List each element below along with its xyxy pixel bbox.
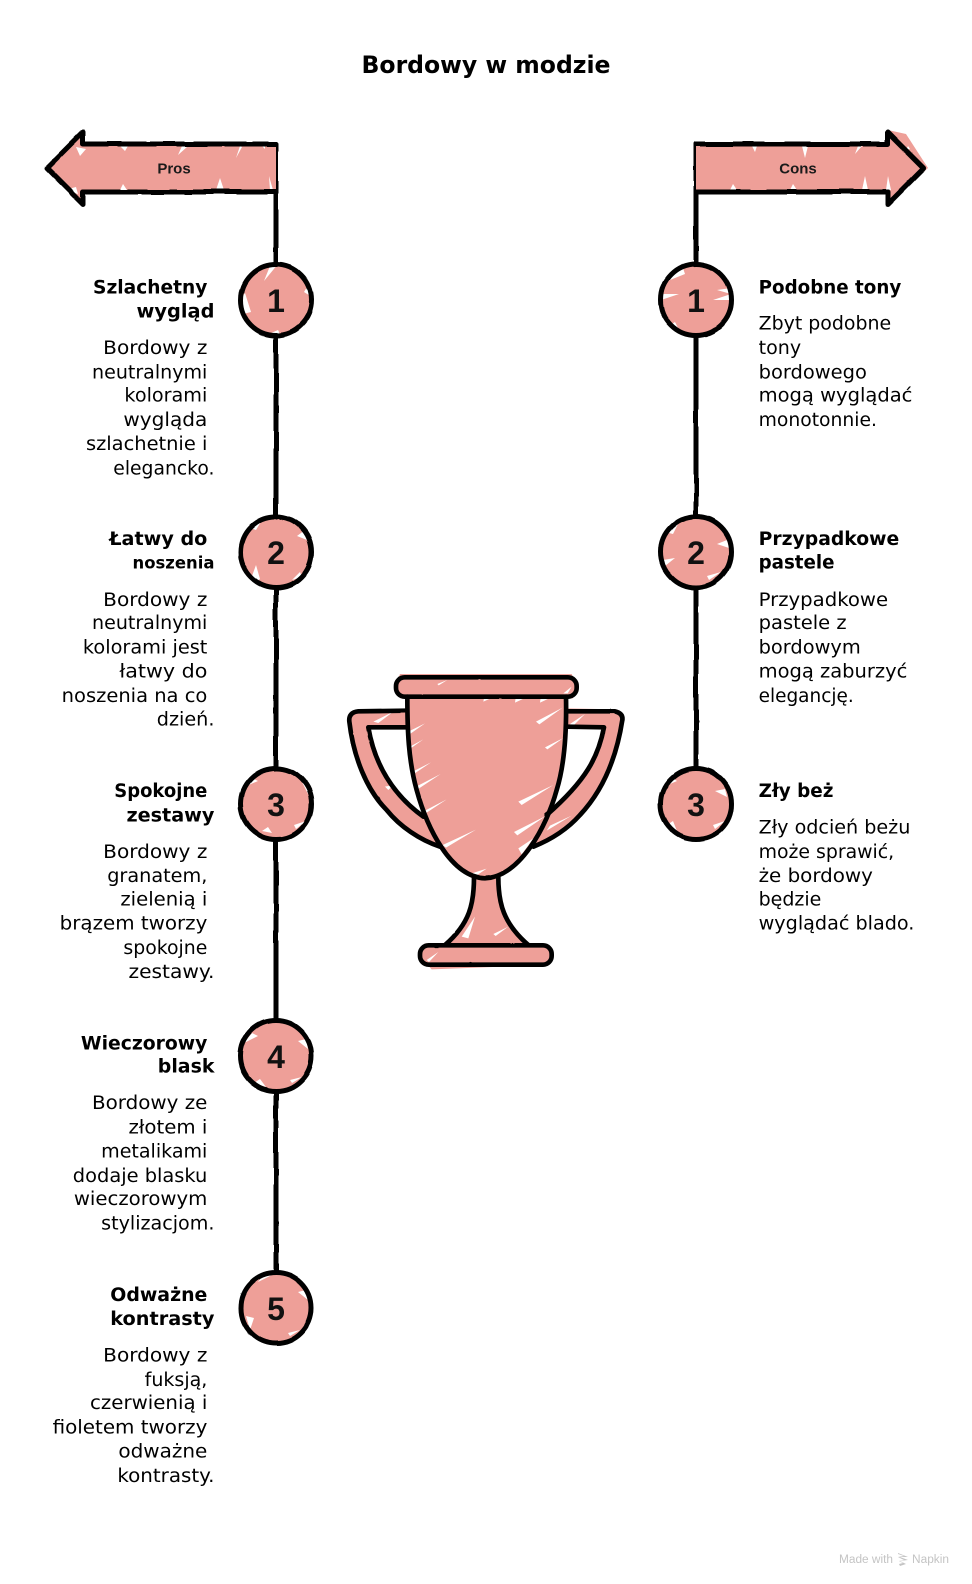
- text: Szlachetny wygląd: kolorami: [124, 386, 207, 407]
- text: Zły beż: [759, 781, 914, 935]
- text: Spokojne zestawy: Spokojne: [114, 781, 207, 802]
- text: Szlachetny wygląd: elegancko.: [113, 458, 214, 479]
- text: Spokojne zestawy: zestawy: [126, 805, 215, 826]
- marker 1: 1: [687, 283, 705, 319]
- text: Wieczorowy blask: złotem i: [128, 1117, 207, 1138]
- arrow: pros: [46, 132, 276, 204]
- text: Spokojne zestawy: [60, 781, 215, 983]
- text: Podobne tony: monotonnie.: [759, 410, 877, 431]
- marker 2: 2: [687, 535, 705, 571]
- text: Odważne kontrasty: kontrasty.: [117, 1466, 214, 1487]
- text: Podobne tony: mogą wyglądać: [759, 386, 912, 407]
- text: Szlachetny wygląd: neutralnymi: [92, 362, 207, 383]
- text: Spokojne zestawy: zielenią i: [120, 889, 207, 910]
- trophy outline: [349, 677, 622, 965]
- text: Szlachetny wygląd: [86, 277, 214, 479]
- text: Przypadkowe pastele: mogą zaburzyć: [759, 662, 907, 683]
- text: Spokojne zestawy: spokojne: [123, 938, 207, 959]
- text: Podobne tony: Podobne tony: [759, 277, 901, 298]
- marker 3: 3: [687, 787, 705, 823]
- text: Łatwy do noszenia: noszenia na co: [62, 686, 207, 707]
- text: Odważne kontrasty: czerwienią i: [90, 1393, 207, 1414]
- text: Wieczorowy blask: Bordowy ze: [92, 1093, 207, 1114]
- marker 1: [660, 264, 732, 336]
- footer: Made with Napkin: [839, 1553, 949, 1566]
- text: Podobne tony: Zbyt podobne: [759, 314, 891, 335]
- text: Wieczorowy blask: blask: [158, 1057, 215, 1078]
- title: Bordowy w modzie: [362, 51, 610, 79]
- pros item 5: [53, 1272, 312, 1487]
- text: Przypadkowe pastele: [759, 529, 907, 707]
- marker 2: 2: [267, 535, 285, 571]
- text: Łatwy do noszenia: łatwy do: [119, 662, 207, 683]
- text: Odważne kontrasty: Odważne: [110, 1285, 207, 1306]
- trophy: [348, 674, 624, 969]
- text: Szlachetny wygląd: wygląda: [123, 410, 207, 431]
- text: Łatwy do noszenia: neutralnymi: [92, 613, 207, 634]
- marker 3: [240, 768, 312, 840]
- marker 1: 1: [267, 283, 285, 319]
- text: Wieczorowy blask: [73, 1033, 215, 1234]
- text: Podobne tony: [759, 277, 912, 431]
- arrow: cons: [696, 130, 928, 204]
- marker 5: 5: [267, 1291, 285, 1327]
- text: Odważne kontrasty: kontrasty: [110, 1309, 215, 1330]
- text: Przypadkowe pastele: Przypadkowe: [759, 590, 888, 611]
- text: Łatwy do noszenia: [62, 529, 214, 730]
- vertical timeline: pros: [274, 144, 278, 1285]
- footer: Made with Napkin: Napkin: [912, 1554, 949, 1566]
- vertical timeline: cons: [694, 144, 698, 780]
- text: Zły beż: będzie: [759, 889, 821, 910]
- pros item 1: [86, 264, 312, 479]
- text: Odważne kontrasty: odważne: [118, 1442, 207, 1463]
- text: Podobne tony: tony: [759, 338, 801, 359]
- footer: Made with Napkin: Made with: [839, 1554, 893, 1566]
- text: Łatwy do noszenia: kolorami jest: [83, 637, 207, 658]
- text: Szlachetny wygląd: szlachetnie i: [86, 434, 207, 455]
- text: Przypadkowe pastele: elegancję.: [759, 686, 854, 707]
- text: Zły beż: Zły beż: [759, 781, 833, 802]
- text: Zły beż: może sprawić,: [759, 842, 894, 863]
- pros item 2: [62, 516, 312, 730]
- text: Łatwy do noszenia: Bordowy z: [103, 590, 207, 611]
- marker 4: [240, 1020, 312, 1092]
- marker 3: 3: [267, 787, 285, 823]
- label: Pros: Pros: [157, 160, 191, 178]
- text: Odważne kontrasty: [53, 1285, 215, 1487]
- text: Wieczorowy blask: dodaje blasku: [73, 1166, 207, 1187]
- trophy fill: [348, 674, 624, 969]
- pros item 4: [73, 1020, 312, 1234]
- text: Odważne kontrasty: fioletem tworzy: [53, 1417, 208, 1438]
- text: Łatwy do noszenia: noszenia: [133, 553, 214, 573]
- text: Spokojne zestawy: zestawy.: [128, 962, 214, 983]
- text: Wieczorowy blask: wieczorowym: [74, 1189, 207, 1210]
- text: Szlachetny wygląd: Bordowy z: [103, 338, 207, 359]
- marker 3: [660, 768, 732, 840]
- cons item 2: [660, 516, 907, 707]
- marker 2: [240, 516, 312, 588]
- text: Szlachetny wygląd: Szlachetny: [93, 277, 207, 298]
- text: Szlachetny wygląd: wygląd: [137, 302, 214, 323]
- text: Wieczorowy blask: Wieczorowy: [81, 1033, 207, 1054]
- text: Wieczorowy blask: metalikami: [101, 1142, 207, 1163]
- text: Przypadkowe pastele: pastele z: [759, 613, 847, 634]
- marker 2: [660, 516, 732, 588]
- label: Cons: Cons: [779, 160, 817, 178]
- text: Podobne tony: bordowego: [759, 362, 867, 383]
- text: Przypadkowe pastele: pastele: [759, 552, 834, 573]
- text: Zły beż: Zły odcień beżu: [759, 817, 910, 838]
- text: Wieczorowy blask: stylizacjom.: [101, 1213, 214, 1234]
- marker 4: 4: [267, 1039, 285, 1075]
- cons item 1: [660, 264, 912, 431]
- marker 5: [240, 1272, 312, 1344]
- text: Spokojne zestawy: granatem,: [107, 866, 207, 887]
- pros item 3: [60, 768, 312, 983]
- trophy highlights: [373, 680, 585, 962]
- text: Odważne kontrasty: Bordowy z: [103, 1346, 207, 1367]
- text: Łatwy do noszenia: dzień.: [157, 709, 214, 730]
- text: Odważne kontrasty: fuksją,: [145, 1370, 207, 1391]
- text: Zły beż: że bordowy: [759, 866, 873, 887]
- cons item 3: [660, 768, 914, 935]
- marker 1: [239, 264, 312, 336]
- text: Zły beż: wyglądać blado.: [759, 914, 914, 935]
- text: Spokojne zestawy: brązem tworzy: [60, 914, 208, 935]
- text: Łatwy do noszenia: Łatwy do: [108, 529, 207, 550]
- text: Przypadkowe pastele: Przypadkowe: [759, 529, 899, 550]
- text: Spokojne zestawy: Bordowy z: [103, 842, 207, 863]
- text: Przypadkowe pastele: bordowym: [759, 637, 861, 658]
